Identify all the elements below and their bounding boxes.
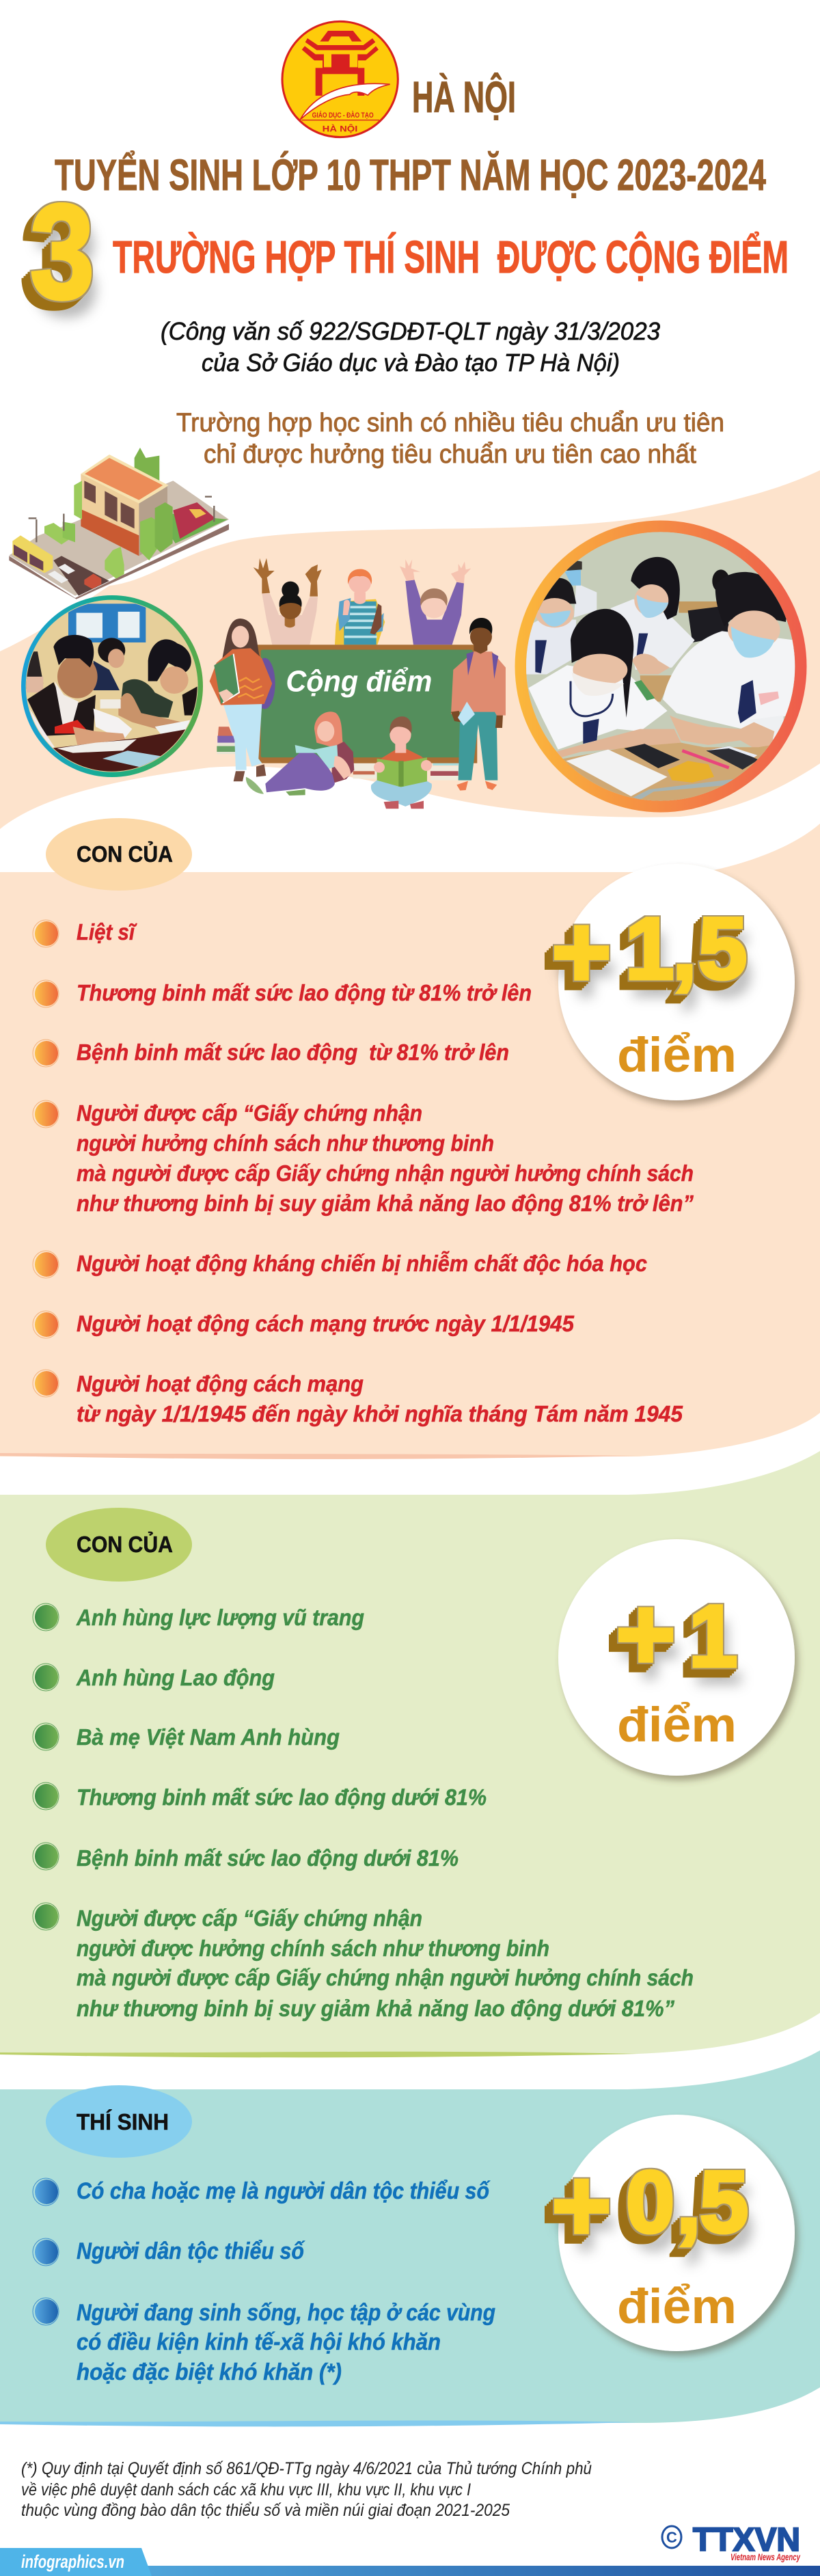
footnote	[21, 2459, 592, 2520]
list: beneficiaries for 1 point: Bà mẹ Việt Nam Anh hùng	[77, 1724, 340, 1750]
panel: +0.5 point	[0, 2050, 820, 2426]
back student: red-haired boy with backpack	[335, 569, 385, 645]
score badge: +0,5 điểm: +	[551, 2147, 612, 2262]
panel: +1.5 points	[0, 818, 820, 1459]
list: beneficiaries for 1.5 points: Người hoạt động kháng chiến bị nhiễm chất độc hóa học	[77, 1251, 647, 1276]
list: beneficiaries for 1 point: Thương binh mất sức lao động dưới 81%	[77, 1785, 487, 1810]
score badge: +1 điểm	[558, 1539, 795, 1776]
list: beneficiaries for 1.5 points: Người được cấp “Giấy chứng nhận	[77, 1100, 422, 1126]
list: beneficiaries for 1 point: như thương binh bị suy giảm khả năng lao động dưới 81%”	[77, 1996, 674, 2021]
logo: Hanoi education department: GIÁO DỤC - ĐÀO TẠO	[312, 111, 374, 120]
back student: girl with bun	[254, 558, 322, 645]
note about highest priority: chỉ được hưởng tiêu chuẩn ưu tiên cao nhất	[204, 440, 696, 469]
logo: TTXVN	[662, 2522, 801, 2562]
list: beneficiaries for 1.5 points: Liệt sĩ	[77, 919, 137, 945]
list: beneficiaries for 1.5 points: mà người được cấp Giấy chứng nhận người hưởng chính sách	[77, 1161, 694, 1186]
list: beneficiaries for 1 point	[33, 1603, 694, 2021]
list: beneficiaries for 1.5 points	[33, 919, 694, 1426]
photo: masked students in exam (right)	[515, 521, 806, 812]
list: beneficiaries for 1.5 points: Người hoạt động cách mạng trước ngày 1/1/1945	[77, 1311, 575, 1336]
list: beneficiaries for 1 point: mà người được cấp Giấy chứng nhận người hưởng chính sách	[77, 1965, 694, 1990]
panel: +1 point	[0, 1451, 820, 2057]
list: beneficiaries for 0.5 point: Có cha hoặc mẹ là người dân tộc thiểu số	[77, 2178, 491, 2204]
source citation	[161, 317, 660, 377]
illustration: isometric school	[9, 448, 229, 599]
list: beneficiaries for 0.5 point	[33, 2178, 495, 2385]
footnote: về việc phê duyệt danh sách các xã khu vực III, khu vực II, khu vực I	[21, 2480, 471, 2499]
illustration: students around blackboard	[210, 558, 506, 809]
score badge: +0,5 điểm: 0,5	[626, 2154, 748, 2251]
list: beneficiaries for 1.5 points: người hưởng chính sách như thương binh	[77, 1130, 494, 1156]
section tag: thí sinh: THÍ SINH	[77, 2109, 169, 2134]
score badge: +0,5 điểm	[551, 2115, 795, 2351]
list: beneficiaries for 1 point: Người được cấp “Giấy chứng nhận	[77, 1906, 422, 1931]
list: beneficiaries for 1 point: người được hưởng chính sách như thương binh	[77, 1936, 549, 1961]
score badge: +0,5 điểm: điểm	[617, 2280, 737, 2334]
score badge: +1,5 điểm	[551, 864, 795, 1100]
score badge: +1,5 điểm: 1,5	[625, 900, 747, 998]
sitting boy reading	[371, 716, 432, 809]
score badge: +1 điểm: điểm	[617, 1698, 737, 1752]
blackboard: Cộng điểm	[286, 666, 432, 699]
background: peach wave	[0, 470, 820, 829]
score badge: +1,5 điểm: +	[551, 894, 612, 1009]
list: beneficiaries for 1.5 points: từ ngày 1/1/1945 đến ngày khởi nghĩa tháng Tám năm 1945	[77, 1401, 683, 1426]
section tag: con của	[46, 818, 192, 891]
list: beneficiaries for 1.5 points: Bệnh binh mất sức lao động từ 81% trở lên	[77, 1040, 509, 1065]
list: beneficiaries for 0.5 point: hoặc đặc biệt khó khăn (*)	[77, 2359, 342, 2385]
standing girl with book	[210, 619, 275, 781]
source citation: (Công văn số 922/SGDĐT-QLT ngày 31/3/2023	[161, 317, 660, 345]
list: beneficiaries for 1 point: Anh hùng lực lượng vũ trang	[76, 1605, 364, 1630]
list: beneficiaries for 1 point: Anh hùng Lao động	[76, 1665, 275, 1690]
heading: Hà Nội: HÀ NỘI	[412, 72, 516, 122]
section tag: con của: CON CỦA	[77, 841, 173, 867]
list: beneficiaries for 0.5 point: Người đang sinh sống, học tập ở các vùng	[77, 2300, 495, 2326]
score badge: +1 điểm: 1	[689, 1588, 737, 1685]
section tag: con của	[46, 1508, 192, 1582]
footer bar: infographics.vn	[21, 2551, 124, 2572]
footer bar	[0, 2548, 820, 2576]
big gold number 3: 3	[30, 176, 94, 327]
footnote: thuộc vùng đồng bào dân tộc thiểu số và miền núi giai đoạn 2021-2025	[21, 2501, 510, 2520]
book stacks	[217, 727, 459, 781]
list: beneficiaries for 1.5 points: Thương binh mất sức lao động từ 81% trở lên	[77, 980, 532, 1005]
list: beneficiaries for 1.5 points: Người hoạt động cách mạng	[77, 1371, 364, 1396]
section tag: con của: CON CỦA	[77, 1532, 173, 1557]
note about highest priority: Trường hợp học sinh có nhiều tiêu chuẩn ưu tiên	[176, 409, 724, 437]
blackboard	[256, 645, 477, 763]
note about highest priority	[176, 409, 724, 469]
standing boy with tablet	[451, 618, 506, 791]
photo: ethnic minority students (left)	[21, 595, 205, 784]
section tag: thí sinh	[46, 2085, 192, 2158]
logo: TTXVN: C	[666, 2529, 677, 2546]
score badge: +1,5 điểm: điểm	[617, 1029, 737, 1083]
list: beneficiaries for 1 point: Bệnh binh mất sức lao động dưới 81%	[77, 1845, 459, 1871]
logo: Hanoi education department	[282, 21, 398, 137]
list: beneficiaries for 1.5 points: như thương binh bị suy giảm khả năng lao động 81% trở lên”	[77, 1191, 694, 1216]
list: beneficiaries for 0.5 point: Người dân tộc thiểu số	[77, 2238, 305, 2264]
sitting girl reading	[246, 711, 354, 796]
score badge: +1 điểm: +	[616, 1576, 676, 1691]
list: beneficiaries for 0.5 point: có điều kiện kinh tế-xã hội khó khăn	[77, 2329, 441, 2355]
footnote: (*) Quy định tại Quyết định số 861/QĐ-TTg ngày 4/6/2021 của Thủ tướng Chính phủ	[21, 2459, 592, 2478]
logo: Hanoi education department: HÀ NỘI	[323, 123, 357, 133]
logo: TTXVN: TTXVN	[693, 2522, 800, 2558]
source citation: của Sở Giáo dục và Đào tạo TP Hà Nội)	[202, 349, 620, 377]
back student: boy in purple raising hands	[400, 559, 471, 645]
